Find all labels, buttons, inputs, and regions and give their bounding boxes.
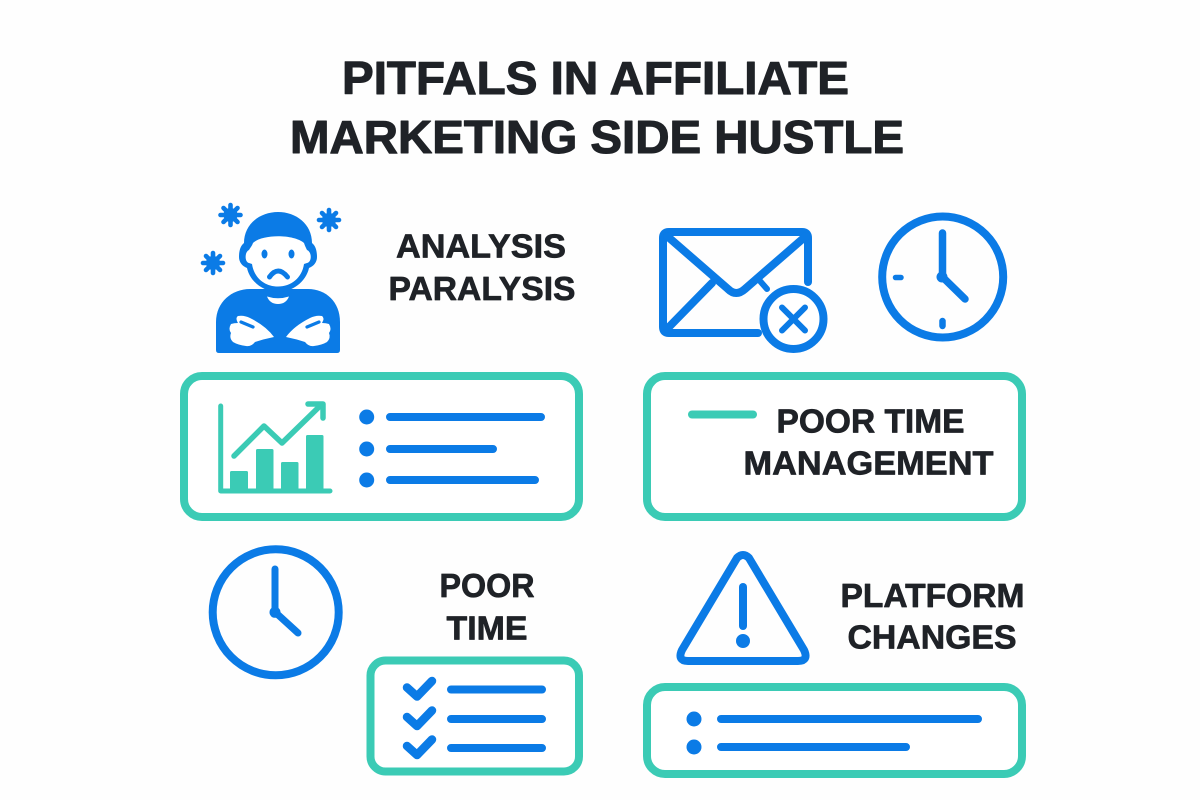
heading: analysis paralysis: ANALYSIS — [396, 228, 566, 266]
icon: clock top right — [882, 216, 1003, 338]
heading: poor time: POOR — [440, 568, 534, 605]
icon: stress spark top left — [220, 205, 240, 225]
title: PITFALS IN AFFILIATE — [342, 52, 849, 104]
title — [290, 52, 904, 163]
heading: poor time management: MANAGEMENT — [744, 446, 994, 482]
icon: clock bottom left — [213, 549, 339, 675]
icon: check marks — [407, 681, 432, 755]
icon: warning triangle — [680, 555, 806, 661]
icon: stress spark top right — [319, 210, 339, 230]
panel: poor time management — [647, 376, 1022, 517]
title: MARKETING SIDE HUSTLE — [290, 111, 904, 163]
accent dash — [692, 410, 753, 418]
list: three bullet lines — [359, 410, 541, 488]
panel: checklist — [370, 660, 579, 772]
heading: platform changes: CHANGES — [848, 620, 1016, 656]
heading: analysis paralysis — [388, 228, 576, 308]
heading: platform changes: PLATFORM — [840, 578, 1024, 615]
chart: rising bars and trend arrow — [221, 404, 330, 491]
heading: poor time: TIME — [446, 610, 528, 648]
icon: envelope with x badge — [663, 232, 824, 349]
panel: platform changes list — [647, 687, 1022, 774]
list: checklist lines — [451, 690, 542, 748]
panel: analysis chart and list — [184, 376, 579, 517]
heading: poor time management — [744, 404, 994, 482]
icon: stressed person with arms crossed — [203, 205, 340, 353]
heading: analysis paralysis: PARALYSIS — [388, 271, 576, 308]
icon: stress spark left — [203, 253, 223, 273]
heading: poor time management: POOR TIME — [776, 404, 964, 440]
heading: platform changes — [840, 578, 1024, 656]
heading: poor time — [440, 568, 534, 648]
